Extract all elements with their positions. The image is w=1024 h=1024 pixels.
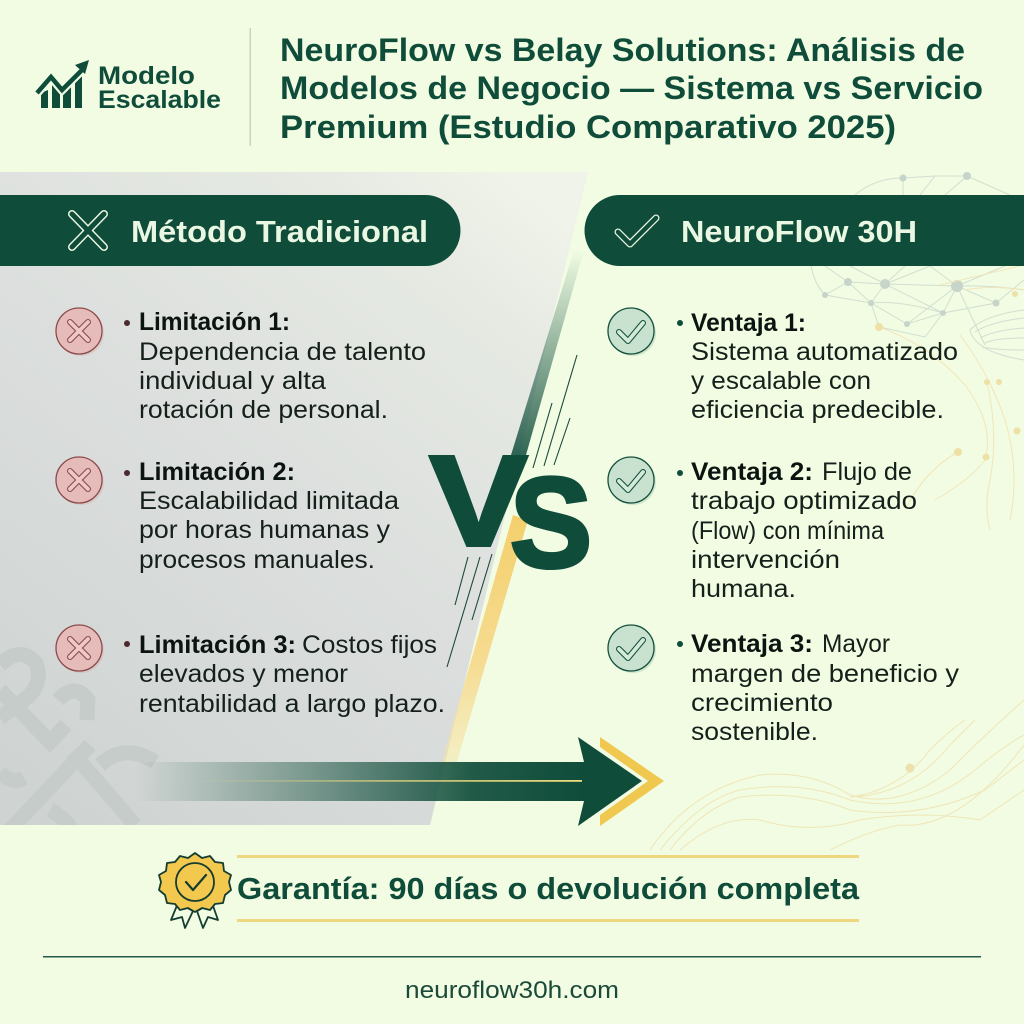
bullet: [677, 320, 683, 326]
title: NeuroFlow vs Belay Solutions: Análisis de: [280, 32, 965, 68]
text block: Limitación 1:: [139, 308, 290, 336]
text block: rotación de personal.: [139, 396, 388, 424]
advantage 3: [608, 625, 960, 746]
text block: eficiencia predecible.: [691, 396, 944, 424]
diagonal divider: yellow: [441, 515, 528, 765]
decoration: golden filaments: [875, 265, 1024, 530]
bullet: [124, 320, 130, 326]
text block: [691, 458, 917, 603]
text block: rentabilidad a largo plazo.: [139, 690, 445, 718]
speed lines: [447, 355, 577, 667]
text block: Ventaja 3:: [691, 630, 813, 658]
VS emblem: [430, 430, 592, 595]
guarantee rules: [237, 855, 859, 922]
icon: header cross: [72, 214, 104, 247]
title: Modelos de Negocio — Sistema vs Servicio: [280, 70, 983, 106]
logo text: Escalable: [98, 86, 221, 114]
text block: intervención: [691, 546, 840, 574]
VS emblem: V: [430, 430, 527, 573]
text block: trabajo optimizado: [691, 487, 917, 515]
text block: Limitación 3:: [139, 631, 296, 659]
VS emblem: S: [510, 452, 592, 595]
text block: margen de beneficio y: [691, 660, 960, 688]
text block: y escalable con: [691, 367, 871, 395]
icon: check: [608, 308, 656, 356]
logo text: Modelo: [98, 62, 195, 90]
guarantee: [159, 853, 860, 928]
text block: [691, 309, 958, 424]
text block: Costos fijos: [302, 631, 437, 659]
text block: procesos manuales.: [139, 546, 375, 574]
guarantee text: Garantía: 90 días o devolución completa: [237, 871, 860, 906]
text block: elevados y menor: [139, 660, 348, 688]
decoration: golden waves: [650, 700, 1024, 850]
bullet: [124, 470, 130, 476]
diagonal divider: green: [511, 250, 584, 455]
text block: sostenible.: [691, 718, 818, 746]
footer url: neuroflow30h.com: [405, 977, 619, 1004]
text block: Ventaja 2:: [691, 458, 813, 486]
text block: Flujo de: [822, 458, 912, 486]
text block: por horas humanas y: [139, 516, 391, 544]
text block: Limitación 2:: [139, 458, 295, 486]
logo: [37, 60, 221, 114]
text block: humana.: [691, 575, 796, 603]
arrow: [135, 737, 664, 826]
logo text: [98, 62, 221, 114]
header divider: [250, 28, 251, 146]
bullet: [677, 641, 683, 647]
icon: growth chart: [37, 60, 89, 108]
icon: check: [608, 457, 656, 505]
icon: header check: [618, 218, 656, 244]
text block: crecimiento: [691, 689, 833, 717]
text block: Dependencia de talento: [139, 338, 426, 366]
text block: [139, 308, 426, 424]
title: Premium (Estudio Comparativo 2025): [280, 109, 896, 145]
arrow chevron: [600, 737, 664, 826]
advantage 2: [608, 457, 917, 603]
text block: Mayor: [822, 630, 890, 658]
text block: [139, 631, 445, 718]
decoration: broken knot: [0, 654, 155, 830]
text block: Ventaja 1:: [691, 309, 806, 337]
text block: [691, 630, 960, 746]
bullet: [677, 470, 683, 476]
advantage 1: [608, 308, 958, 424]
decoration: neural network brain: [811, 172, 1024, 360]
header: Método Tradicional: Método Tradicional: [131, 214, 428, 249]
footer rule: [43, 956, 981, 958]
icon: check: [608, 625, 656, 673]
header: NeuroFlow 30H: NeuroFlow 30H: [681, 214, 917, 249]
text block: (Flow) con mínima: [691, 517, 884, 545]
text block: Escalabilidad limitada: [139, 487, 399, 515]
text block: [139, 458, 399, 574]
icon: cross: [56, 457, 104, 505]
bullet: [124, 641, 130, 647]
limitation 2: [56, 457, 399, 574]
limitation 3: [56, 625, 445, 718]
header: NeuroFlow 30H: [584, 195, 1024, 266]
icon: cross: [56, 625, 104, 673]
title: [280, 32, 983, 145]
text block: Sistema automatizado: [691, 338, 958, 366]
text block: individual y alta: [139, 367, 326, 395]
icon: seal: [159, 853, 231, 928]
limitation 1: [56, 308, 426, 424]
icon: cross: [56, 308, 104, 356]
header: Método Tradicional: [0, 195, 460, 266]
panel: traditional background: [0, 172, 588, 825]
